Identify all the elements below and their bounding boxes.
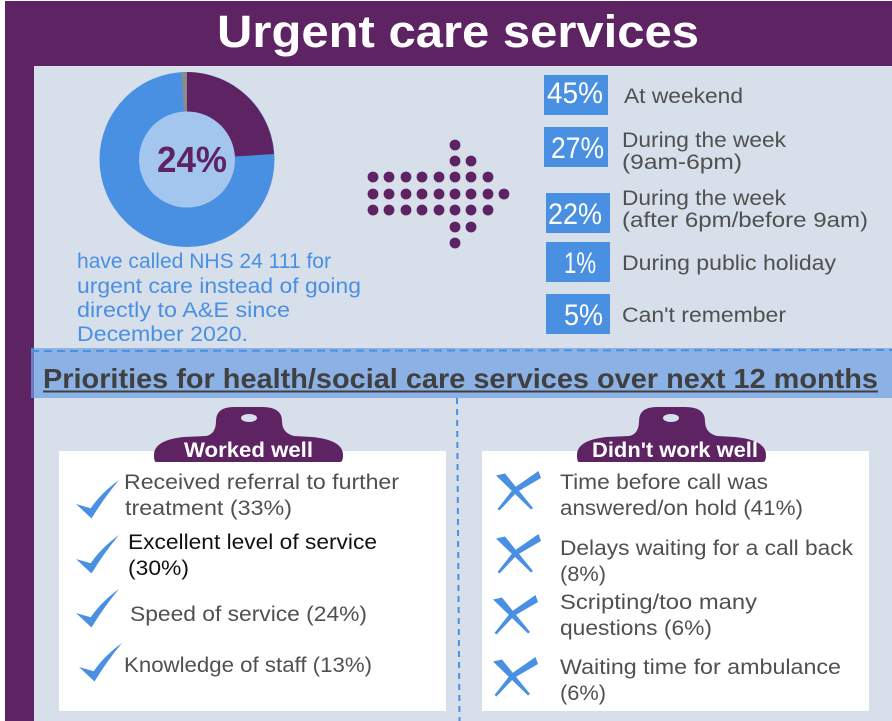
item: scripting: Scripting/too many (560, 591, 758, 614)
item: time before call answered (496, 471, 803, 520)
donut caption: directly to A&E since (77, 299, 290, 322)
title: Urgent care services (217, 6, 699, 57)
stat: can't remember 5% (546, 294, 786, 334)
donut chart: 24% (100, 72, 274, 247)
item: knowledge of staff: Knowledge of staff (13%) (124, 654, 372, 677)
item: received referral: Received referral to further (124, 471, 399, 494)
stat: public holiday 1%: During public holiday (622, 252, 837, 275)
stat: during the week after 6pm 22%: 22% (548, 198, 602, 231)
item: time before call answered: answered/on hold (41%) (560, 497, 803, 520)
stat: during the week after 6pm 22% (546, 187, 868, 233)
stat: during the week after 6pm 22%: (after 6pm/before 9am) (622, 209, 868, 232)
section heading band: Priorities for health/social care services over next 12 months (43, 363, 878, 394)
stat: at weekend 45% (544, 75, 743, 115)
stat: at weekend 45%: At weekend (624, 85, 743, 108)
stat: during the week 9am-6pm 27%: During the week (622, 129, 787, 152)
icon: dotted arrow (368, 140, 509, 248)
item: delays waiting for call back: (8%) (560, 563, 606, 586)
section heading band (31, 348, 892, 398)
donut caption: urgent care instead of going (77, 275, 361, 298)
item: received referral (76, 471, 399, 520)
stat: public holiday 1%: 1% (564, 247, 596, 280)
item: received referral: treatment (33%) (125, 497, 292, 520)
clipboard header: worked well (154, 407, 343, 462)
item: speed of service: Speed of service (24%) (130, 603, 367, 626)
stat: during the week 9am-6pm 27%: (9am-6pm) (622, 151, 742, 174)
item: speed of service (76, 589, 367, 628)
item: excellent level of service: (30%) (128, 557, 189, 580)
item: waiting time for ambulance: (6%) (560, 682, 606, 705)
stat: during the week 9am-6pm 27%: 27% (551, 132, 604, 165)
stat: during the week after 6pm 22%: During the week (622, 187, 787, 210)
donut caption (77, 250, 361, 346)
stat: can't remember 5%: 5% (564, 299, 603, 332)
item: waiting time for ambulance (493, 656, 841, 705)
clipboard header: worked well: Worked well (184, 439, 313, 462)
stat: can't remember 5%: Can't remember (622, 304, 786, 327)
clipboard header: didn't work well (577, 407, 766, 462)
item: excellent level of service: Excellent level of service (128, 531, 377, 554)
panel: didn't work well (482, 407, 869, 711)
item: delays waiting for call back: Delays waiting for a call back (560, 537, 854, 560)
donut chart: 24%: 24% (157, 139, 227, 180)
item: waiting time for ambulance: Waiting time for ambulance (560, 656, 841, 679)
item: knowledge of staff (79, 643, 372, 682)
item: excellent level of service (76, 531, 377, 580)
panel: worked well (59, 407, 446, 711)
donut caption: have called NHS 24 111 for (77, 250, 331, 273)
item: scripting (493, 591, 758, 640)
stat: during the week 9am-6pm 27% (544, 127, 787, 174)
donut caption: December 2020. (77, 323, 248, 346)
clipboard header: didn't work well: Didn't work well (592, 439, 758, 462)
item: scripting: questions (6%) (560, 617, 712, 640)
item: time before call answered: Time before call was (560, 471, 768, 494)
stat: public holiday 1% (546, 242, 837, 282)
item: delays waiting for call back (496, 534, 854, 586)
stat: at weekend 45%: 45% (547, 77, 603, 110)
